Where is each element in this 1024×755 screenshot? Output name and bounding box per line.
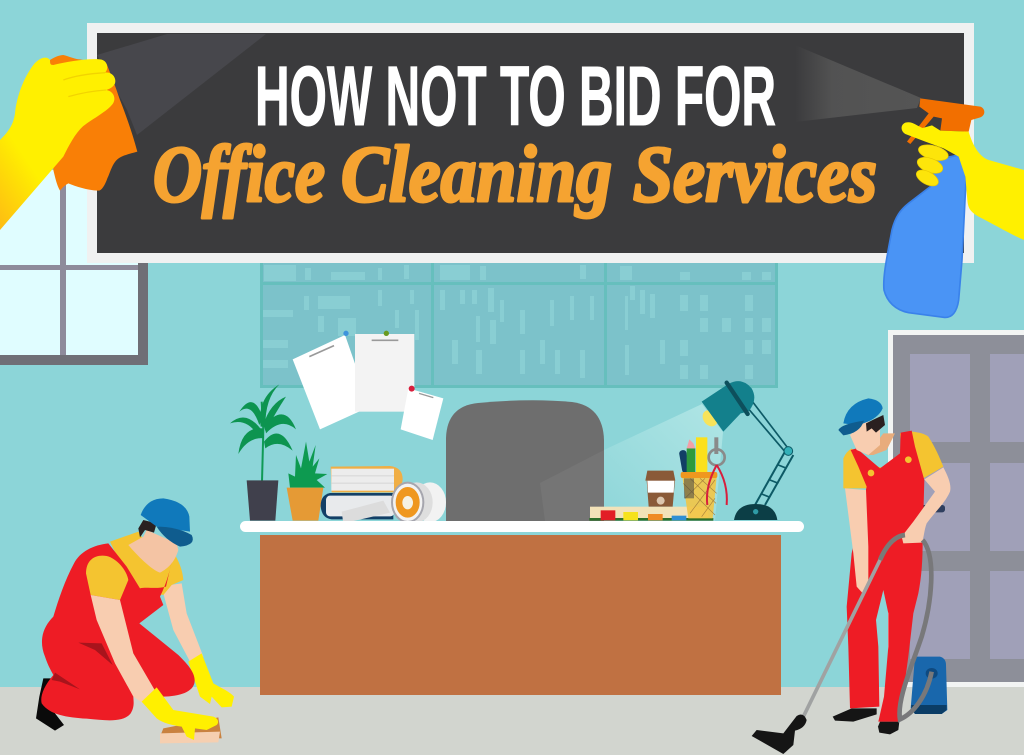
board sheen xyxy=(97,34,266,135)
bulb xyxy=(700,407,720,429)
near glove xyxy=(142,687,218,740)
vacuum head xyxy=(752,715,807,754)
mesh holder xyxy=(681,465,727,518)
vacuum hose xyxy=(900,540,932,719)
far glove xyxy=(188,653,234,707)
yellow glove xyxy=(902,122,1024,240)
spray mist xyxy=(795,45,921,122)
desk items left: plants, books and tape xyxy=(230,384,446,523)
sleeve xyxy=(86,556,128,600)
desk items right: lamp, coffee and pen holder xyxy=(589,381,793,521)
red overalls xyxy=(847,431,924,722)
lamp base xyxy=(734,504,777,520)
far arm xyxy=(163,583,203,662)
overall buttons xyxy=(868,456,912,476)
title line two xyxy=(153,131,877,219)
vacuum handle grip xyxy=(920,505,945,512)
door xyxy=(888,330,1024,687)
hair xyxy=(866,415,885,433)
neck and face xyxy=(128,530,178,573)
vacuum wand xyxy=(803,535,905,717)
overall folds xyxy=(52,643,113,689)
desk xyxy=(240,521,804,695)
hair xyxy=(138,520,157,537)
face xyxy=(850,422,880,455)
pens and tools xyxy=(679,437,725,475)
cleaner kneeling and scrubbing xyxy=(36,498,234,743)
floor xyxy=(0,687,1024,755)
bottle xyxy=(884,155,966,317)
coffee cup xyxy=(645,471,675,507)
vacuum canister xyxy=(911,657,947,714)
cleaner vacuuming xyxy=(752,398,950,754)
cap xyxy=(141,498,193,547)
title line two: Office xyxy=(153,131,325,219)
yellow shirt xyxy=(843,432,943,488)
notebook with tabs xyxy=(589,507,713,521)
neck xyxy=(867,433,895,455)
title board xyxy=(87,23,974,263)
cap xyxy=(838,398,883,435)
fingers xyxy=(914,142,950,189)
boot xyxy=(36,678,64,731)
shoes xyxy=(833,708,899,734)
dark pot xyxy=(247,480,278,521)
title line two: Services xyxy=(633,131,877,219)
tape rolls xyxy=(414,482,446,522)
cloth xyxy=(50,55,137,191)
chair back xyxy=(446,400,604,521)
window on left wall xyxy=(0,170,148,365)
right hand with spray bottle xyxy=(884,98,1024,317)
lamp light beam xyxy=(604,404,723,521)
tall plant xyxy=(230,384,296,482)
pinned papers xyxy=(293,331,443,440)
trigger nozzle xyxy=(907,98,984,144)
yellow shirt xyxy=(110,532,183,595)
red overalls xyxy=(41,543,195,720)
near arm xyxy=(845,488,868,594)
lower book xyxy=(321,493,393,519)
upper book xyxy=(331,466,403,492)
small plant xyxy=(288,442,327,488)
city view window xyxy=(260,263,778,388)
far arm xyxy=(902,467,950,543)
yellow glove xyxy=(0,58,115,230)
near arm xyxy=(91,595,157,703)
title line two: Cleaning xyxy=(341,131,612,219)
lamp shade xyxy=(702,381,754,432)
lamp arm xyxy=(747,398,793,505)
finger creases xyxy=(63,73,106,97)
orange pot xyxy=(287,488,323,521)
sponge xyxy=(160,717,222,743)
left hand wiping with cloth xyxy=(0,55,137,230)
